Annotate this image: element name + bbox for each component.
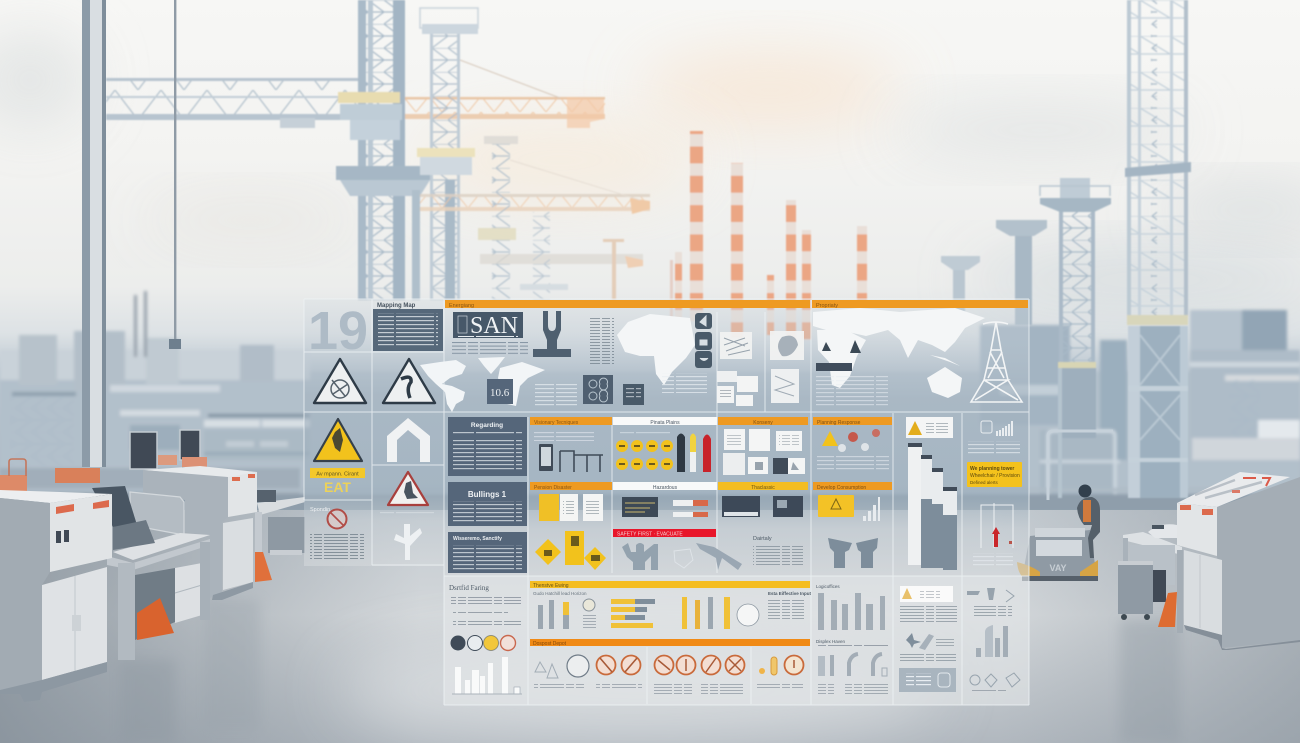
number card — [487, 379, 513, 404]
crane tower 2 — [417, 8, 478, 300]
white bar chart — [452, 657, 522, 694]
bottom left column: Dsrtfid Faring — [449, 584, 489, 592]
icons top far right — [967, 588, 1014, 602]
orange header top right: Propriaty — [816, 303, 838, 309]
crane tower 1 — [336, 0, 431, 300]
small icons far right — [970, 673, 1020, 693]
dark note panel: Mapping Map — [377, 303, 416, 309]
grid lines — [304, 299, 1029, 705]
text block with heading — [768, 591, 812, 620]
note with prohibition sign — [310, 507, 364, 560]
right desk — [1123, 524, 1183, 633]
dark map label — [816, 363, 852, 371]
warning sign: machinery — [314, 359, 366, 403]
section: dark monitors — [718, 482, 808, 517]
gas cylinder icons — [677, 434, 711, 472]
section: phone and furniture: Visionary Tecniques — [534, 420, 579, 426]
yellow callout — [967, 462, 1022, 487]
vehicle — [1017, 528, 1098, 581]
text block dark — [753, 536, 803, 566]
yellow callout: Wheelchair / Provision — [970, 473, 1020, 479]
section: phone and furniture — [530, 417, 612, 472]
background: floor — [0, 510, 1300, 743]
yellow label and EAT text — [310, 468, 365, 495]
tower A — [1125, 0, 1191, 498]
prohibition icon row — [654, 656, 744, 695]
gray bar chart right: Logicoffices — [816, 584, 840, 589]
yellow label and EAT text: EAT — [324, 479, 351, 495]
yellow header bottom — [530, 581, 810, 589]
chart group: grouped bars — [533, 591, 596, 629]
crane tower 4 with jib — [480, 212, 643, 300]
white text block centre — [662, 373, 707, 393]
orange cone mid — [255, 552, 272, 582]
section: dashboard — [613, 482, 717, 517]
white text block — [535, 384, 577, 406]
orange header bottom: Dospost Depot — [533, 641, 567, 647]
world map right — [813, 308, 985, 398]
yellow hazard diamonds — [535, 531, 606, 570]
text block top middle — [590, 318, 614, 364]
red alert bar: SAFETY FIRST · EVACUATE — [617, 532, 683, 538]
side desk — [255, 490, 305, 555]
background: striped chimneys — [670, 131, 867, 340]
yellow callout: We planning tower — [970, 466, 1014, 472]
background: lattice towers right — [941, 0, 1191, 498]
distant tower C — [996, 220, 1047, 325]
section: dashboard: Hazardous — [653, 485, 678, 491]
sketch icon — [674, 549, 693, 568]
tower B — [1040, 178, 1111, 498]
text under red sign — [380, 510, 436, 514]
warning sign: curved road — [383, 359, 435, 403]
yellow callout: Defined alerts — [970, 480, 999, 485]
section: hazard icons: Planning Response — [817, 420, 861, 426]
text block on map — [816, 376, 888, 406]
gray person and extinguisher — [622, 543, 658, 570]
section: yellow hazard card — [813, 482, 892, 521]
big number: 19 — [308, 301, 368, 361]
icon: house outline — [387, 418, 430, 462]
chart group: horizontal bars — [611, 599, 655, 628]
icon: directional arrows — [394, 524, 422, 560]
orange storage boxes — [0, 455, 207, 492]
orange header top main — [445, 300, 810, 309]
right workstation equipment — [1017, 431, 1300, 650]
background: sky — [0, 0, 1300, 520]
sketch cards — [717, 331, 804, 406]
yellow header bottom: Thenstve Ewing — [533, 583, 569, 589]
people and prohibition icons — [534, 655, 642, 690]
section: yellow and white cards — [530, 482, 612, 521]
text far right — [974, 605, 1012, 618]
orange header bottom — [530, 639, 810, 647]
big africa map centre — [617, 314, 695, 385]
gray animal sketch — [696, 543, 742, 570]
background: crane group — [106, 0, 650, 300]
SAN title card: SAN — [470, 313, 518, 339]
SAN title card — [453, 312, 523, 339]
rolling cart — [1118, 561, 1153, 620]
background machine — [143, 466, 257, 600]
worker — [1077, 484, 1100, 558]
glass panel backgrounds — [304, 299, 1029, 705]
yellow warning sign — [314, 419, 362, 461]
bars far right — [976, 625, 1008, 657]
icon: anvil press — [533, 311, 571, 357]
subtitle text lines — [452, 342, 528, 356]
section: yellow hazard card: Develop Consumption — [817, 485, 866, 491]
section: dark monitors: Thaclassic — [751, 485, 775, 491]
cylinder column chart — [908, 443, 957, 570]
frame with red arrow — [973, 503, 1013, 567]
main desk — [92, 486, 210, 660]
crane jib left — [106, 78, 358, 128]
main machine — [0, 490, 112, 702]
orange cone front — [137, 598, 174, 640]
dark note panel — [373, 303, 443, 351]
section: document cards — [718, 417, 808, 475]
left workstation equipment — [0, 430, 305, 702]
section: yellow circle icons — [613, 417, 717, 470]
crane tower 3 with jib — [420, 136, 650, 300]
gray bar chart right — [816, 584, 885, 630]
section: document cards: Konseny — [753, 420, 773, 426]
map markers — [822, 340, 861, 353]
bottom left column — [449, 584, 521, 650]
mini icons and chart top right — [981, 421, 1012, 436]
distant tower D — [941, 256, 980, 318]
dark info panel 2 — [448, 482, 527, 526]
small warning card — [900, 586, 953, 602]
icon: pipe sockets — [828, 538, 878, 568]
number card: 10.6 — [490, 387, 510, 399]
text block dark: Dairtaly — [753, 536, 772, 542]
dark info panel 3: Wisseremo, Sanctify — [453, 536, 502, 542]
orange cone right — [1158, 592, 1177, 627]
dark diagram card — [583, 375, 613, 404]
dark small card — [623, 384, 644, 405]
background: distant industrial skyline — [0, 291, 1300, 512]
section: hazard icons — [813, 417, 892, 470]
section: yellow and white cards: Pension Disaster — [534, 485, 572, 491]
background: window pole and wire — [82, 0, 181, 467]
equipment sketch group — [816, 639, 889, 696]
chart group: grouped bars: Gudo Hatchill lead Horizon — [533, 591, 587, 596]
warning note card — [906, 417, 953, 438]
text block with heading: Esta Eiffective Input — [768, 591, 812, 596]
equipment sketch group: Displex Haven — [816, 639, 846, 644]
dark info panel 1 — [448, 417, 527, 476]
vehicle: VAY — [1049, 563, 1067, 573]
icon: lattice tower — [971, 322, 1022, 402]
orange header top main: Energiang — [449, 303, 474, 309]
dark info panel 2: Bullings 1 — [468, 490, 507, 499]
dark info panel 3 — [448, 532, 527, 573]
gray data box — [899, 668, 956, 692]
text and icons column — [900, 606, 957, 663]
yellow label and EAT text: Av mpann. Cirant — [316, 472, 359, 478]
note with prohibition sign: Spondin — [310, 507, 330, 513]
red warning sign — [388, 472, 428, 505]
world map left — [420, 357, 545, 412]
crane jib orange far end — [400, 60, 605, 128]
orange header top right — [812, 300, 1028, 309]
chart group: vertical bars — [682, 597, 759, 629]
section: yellow circle icons: Pinata Plains — [650, 420, 680, 426]
infographic board — [304, 299, 1029, 705]
pipe frame railing — [1048, 431, 1113, 500]
monitor pair — [130, 430, 200, 472]
dark icon column — [695, 313, 712, 368]
dark info panel 1: Regarding — [471, 422, 503, 429]
flask and circle icon — [757, 656, 804, 690]
text block right — [968, 441, 1020, 455]
red alert bar — [613, 529, 716, 538]
control machine — [1177, 472, 1300, 650]
